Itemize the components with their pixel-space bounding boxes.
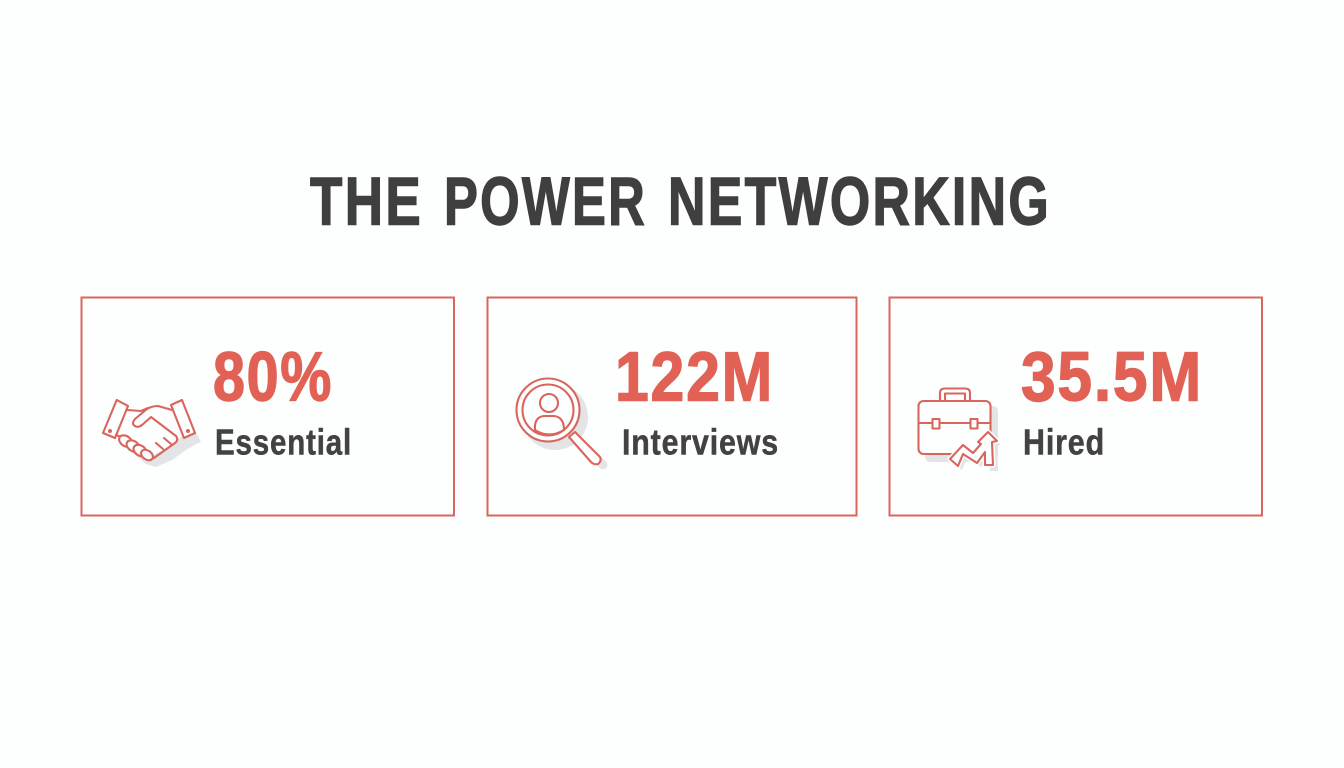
icon: handshake bbox=[103, 400, 201, 467]
title: NETWORKING bbox=[668, 164, 1051, 240]
title: POWER bbox=[444, 164, 647, 240]
stat: 35.5M: 35.5M bbox=[1021, 338, 1203, 416]
stat: 122M: 122M bbox=[615, 338, 774, 416]
icon: briefcase with growth arrow bbox=[918, 388, 1001, 471]
stat: 80%: 80% bbox=[213, 338, 333, 416]
card border bbox=[488, 298, 856, 516]
label: Interviews: Interviews bbox=[622, 422, 779, 462]
title: THE bbox=[310, 164, 423, 240]
card border bbox=[890, 298, 1262, 516]
panel: interviews bbox=[488, 298, 856, 516]
panel: hired bbox=[890, 298, 1262, 516]
title bbox=[310, 164, 1051, 240]
panel: essential bbox=[82, 298, 454, 516]
label: Essential: Essential bbox=[215, 422, 352, 462]
label: Hired: Hired bbox=[1023, 422, 1105, 462]
icon: magnifier with person bbox=[516, 378, 603, 465]
card border bbox=[82, 298, 454, 516]
